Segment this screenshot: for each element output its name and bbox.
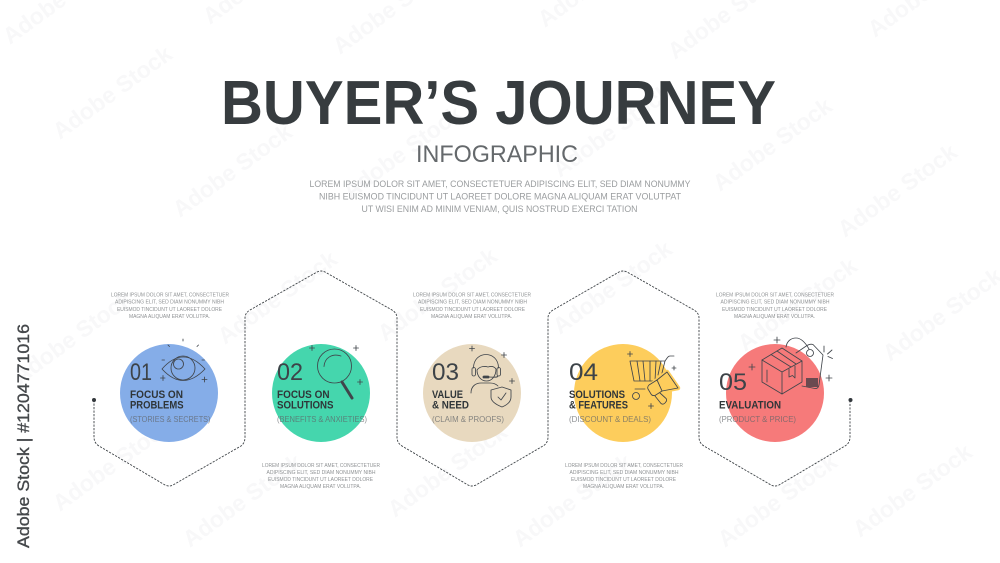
step 1 number: 01	[130, 359, 152, 386]
step 4 description	[565, 463, 683, 490]
step 5: evaluation	[716, 292, 834, 442]
step 1 description: LOREM IPSUM DOLOR SIT AMET, CONSECTETUER	[111, 292, 229, 298]
watermark pattern: Adobe Stock	[548, 78, 677, 182]
step 2 circle	[272, 344, 370, 442]
watermark pattern: Adobe Stock	[168, 118, 297, 222]
icon: magnifying glass	[310, 346, 362, 398]
intro text block: UT WISI ENIM AD MINIM VENIAM, QUIS NOSTRUD EXERCI TATION	[362, 204, 638, 215]
step 5 description: LOREM IPSUM DOLOR SIT AMET, CONSECTETUER	[716, 292, 834, 298]
step 4 heading	[569, 389, 628, 412]
icon: shopping cart and megaphone	[628, 352, 678, 408]
step 2 description: MAGNA ALIQUAM ERAT VOLUTPA.	[280, 484, 361, 490]
intro text block	[310, 179, 691, 215]
step 4 heading: & FEATURES	[569, 400, 628, 412]
watermark pattern: Adobe Stock	[373, 242, 502, 346]
step 1 heading: PROBLEMS	[130, 400, 184, 412]
step 3 description: MAGNA ALIQUAM ERAT VOLUTPA.	[431, 314, 512, 320]
step 2 description: EUISMOD TINCIDUNT UT LAOREET DOLORE	[268, 477, 374, 483]
watermark pattern: Adobe Stock	[548, 235, 677, 339]
icon: headset agent with shield	[470, 346, 514, 407]
watermark pattern: Adobe Stock	[48, 40, 177, 144]
step 1 heading: FOCUS ON	[130, 389, 183, 401]
step 5 description: EUISMOD TINCIDUNT UT LAOREET DOLORE	[722, 307, 828, 313]
step 1 circle	[120, 344, 218, 442]
step 3 heading: & NEED	[432, 400, 469, 412]
watermark pattern: Adobe Stock	[383, 418, 512, 522]
intro text block: NIBH EUISMOD TINCIDUNT UT LAOREET DOLORE MAGNA ALIQUAM ERAT VOLUTPAT	[319, 192, 681, 202]
step 1 heading	[130, 389, 184, 412]
step 2 heading: SOLUTIONS	[277, 400, 334, 412]
step 5 subtitle: (PRODUCT & PRICE)	[719, 414, 796, 424]
step 2 description: LOREM IPSUM DOLOR SIT AMET, CONSECTETUER	[262, 463, 380, 469]
watermark pattern: Adobe Stock	[338, 100, 467, 204]
step 1 description	[111, 292, 229, 320]
adobe stock side label: Adobe Stock | #1204771016	[14, 324, 33, 548]
step 2 heading: FOCUS ON	[277, 389, 330, 401]
watermark pattern: Adobe Stock	[508, 448, 637, 552]
step 3: value and need	[413, 292, 531, 442]
watermark pattern: Adobe Stock	[708, 92, 837, 196]
subtitle: INFOGRAPHIC	[416, 141, 578, 168]
step 3 description: EUISMOD TINCIDUNT UT LAOREET DOLORE	[420, 307, 526, 313]
step 3 number: 03	[432, 359, 459, 386]
icon: box and price tag	[749, 337, 832, 394]
step 4 description: LOREM IPSUM DOLOR SIT AMET, CONSECTETUER	[565, 463, 683, 469]
title: BUYER’S JOURNEY	[221, 69, 776, 138]
step 4 description: MAGNA ALIQUAM ERAT VOLUTPA.	[583, 484, 664, 490]
step 4 number: 04	[569, 359, 598, 386]
step 3 subtitle: (CLAIM & PROOFS)	[432, 414, 504, 424]
icon: eye	[160, 339, 207, 382]
step 2 description: ADIPISCING ELIT, SED DIAM NONUMMY NIBH	[266, 470, 376, 476]
step 5 circle	[726, 344, 824, 442]
watermark pattern: Adobe Stock	[733, 252, 862, 356]
step 2 heading	[277, 389, 334, 412]
step 1 subtitle: (STORIES & SECRETS)	[130, 414, 211, 424]
step 2 number: 02	[277, 359, 303, 386]
step 4 subtitle: (DISCOUNT & DEALS)	[569, 414, 651, 424]
step 4 description: ADIPISCING ELIT, SED DIAM NONUMMY NIBH	[570, 470, 679, 476]
step 5 description	[716, 292, 834, 320]
step 1: focus on problems	[111, 292, 229, 442]
step 1 description: ADIPISCING ELIT, SED DIAM NONUMMY NIBH	[115, 300, 224, 306]
step 5 description: ADIPISCING ELIT, SED DIAM NONUMMY NIBH	[720, 300, 830, 306]
step 5 description: MAGNA ALIQUAM ERAT VOLUTPA.	[734, 314, 815, 320]
step 2 subtitle: (BENEFITS & ANXIETIES)	[277, 414, 367, 424]
step 1 description: EUISMOD TINCIDUNT UT LAOREET DOLORE	[117, 307, 223, 313]
step 5 number: 05	[719, 369, 747, 396]
watermark pattern: Adobe Stock	[848, 438, 977, 542]
step 4 heading: SOLUTIONS	[569, 389, 625, 401]
step 3 heading: VALUE	[432, 389, 463, 401]
intro text block: LOREM IPSUM DOLOR SIT AMET, CONSECTETUER ADIPISCING ELIT, SED DIAM NONUMMY	[310, 179, 691, 190]
watermark pattern: Adobe Stock	[178, 448, 307, 552]
step 2: focus on solutions	[262, 344, 380, 490]
watermark pattern: Adobe Stock	[8, 285, 137, 389]
step 1 description: MAGNA ALIQUAM ERAT VOLUTPA.	[129, 314, 210, 320]
step 3 heading	[432, 389, 469, 412]
watermark pattern: Adobe Stock	[213, 245, 342, 349]
step 3 circle	[423, 344, 521, 442]
watermark pattern: Adobe Stock	[713, 448, 842, 552]
step 3 description	[413, 292, 531, 320]
step 4 description: EUISMOD TINCIDUNT UT LAOREET DOLORE	[571, 477, 677, 483]
step 3 description: LOREM IPSUM DOLOR SIT AMET, CONSECTETUER	[413, 292, 531, 298]
step 2 description	[262, 463, 380, 490]
step 4: solutions and features	[565, 344, 683, 490]
step 5 heading: EVALUATION	[719, 400, 781, 412]
watermark pattern: Adobe Stock	[48, 412, 177, 516]
step 3 description: ADIPISCING ELIT, SED DIAM NONUMMY NIBH	[418, 300, 527, 306]
dashed hexagon journey line	[92, 271, 852, 486]
watermark pattern: Adobe Stock	[833, 138, 962, 242]
step 4 circle	[574, 344, 672, 442]
